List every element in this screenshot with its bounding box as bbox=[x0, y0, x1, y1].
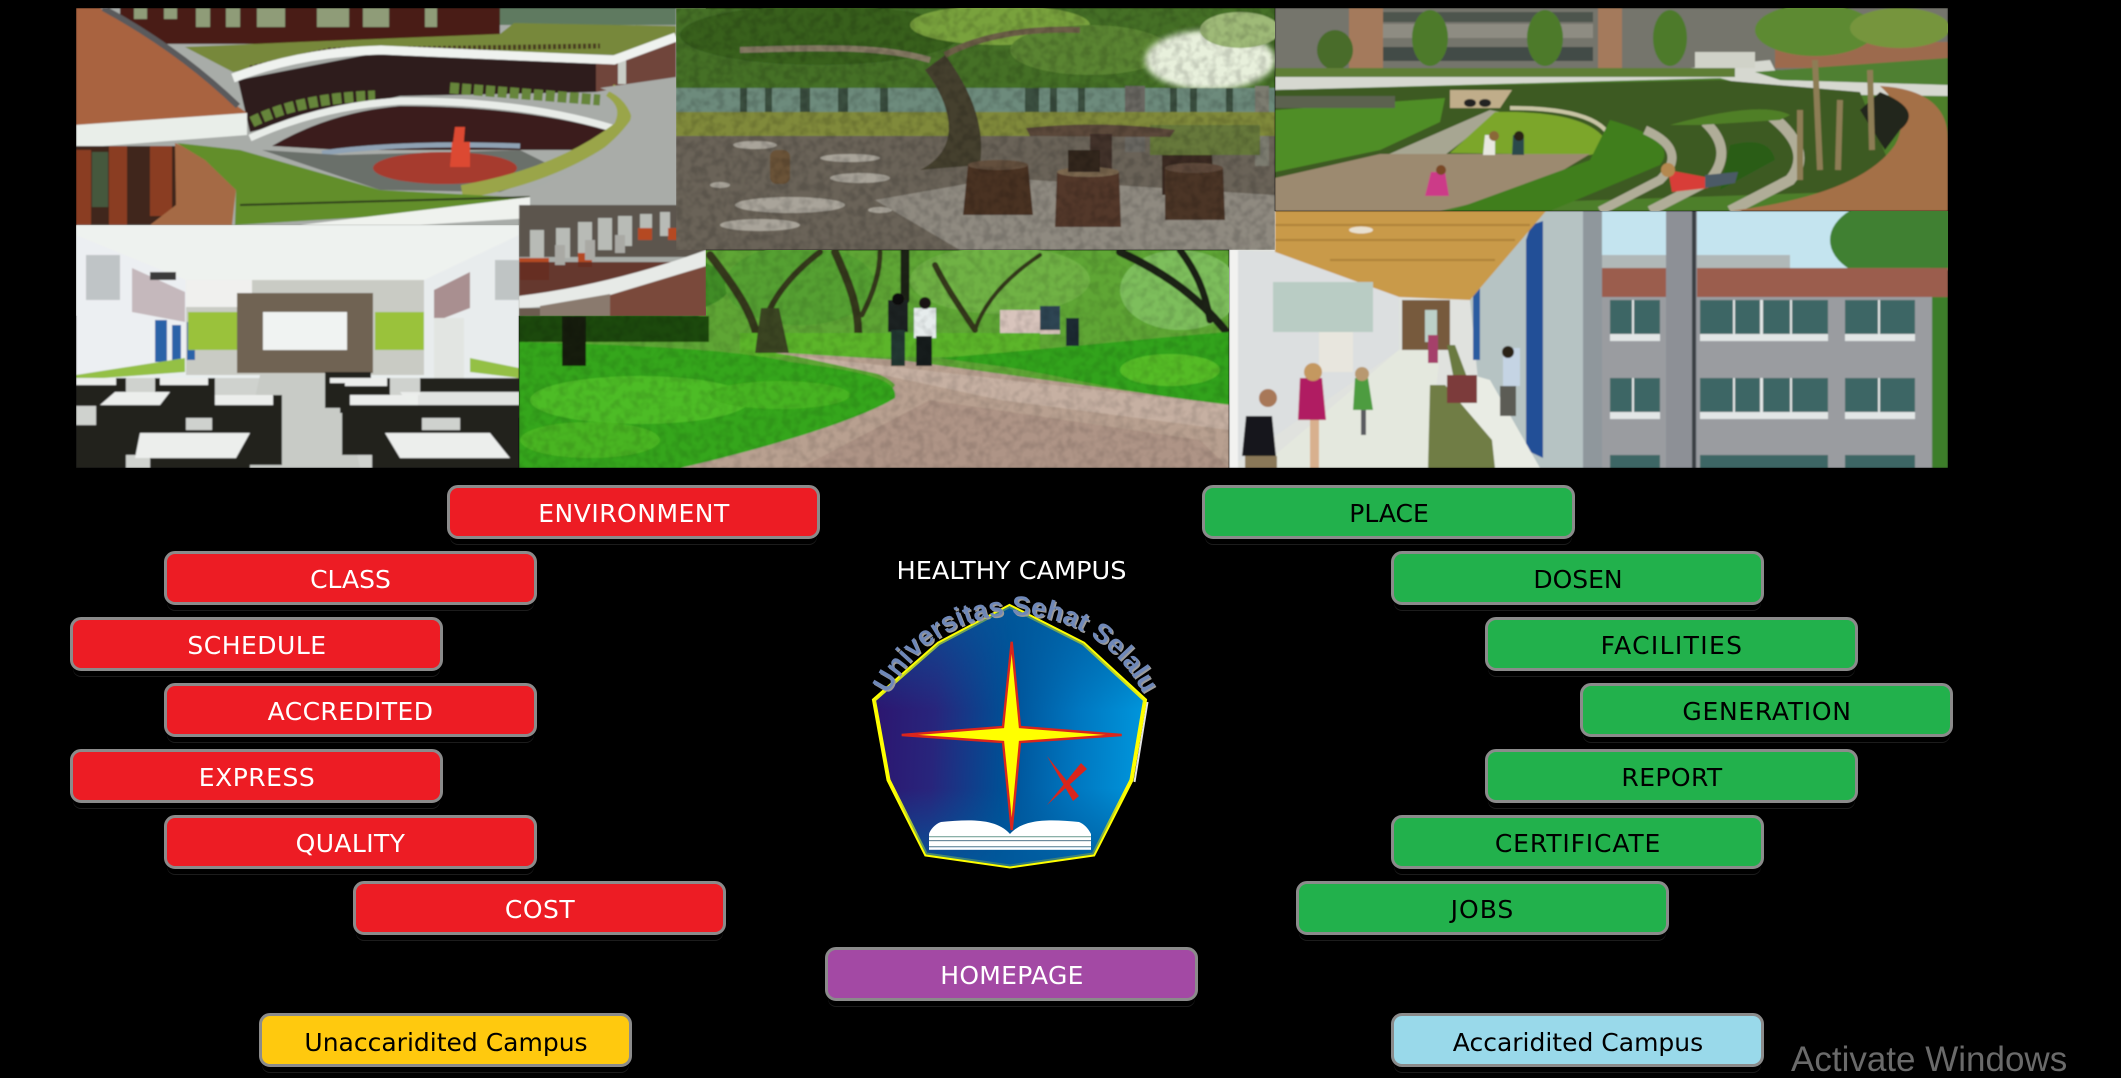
inner lawn bbox=[1450, 112, 1610, 155]
button: QUALITY: QUALITY bbox=[296, 829, 405, 858]
left lawn bbox=[519, 342, 895, 468]
star bbox=[902, 642, 1122, 830]
window side floor bbox=[1462, 376, 1540, 468]
lower dark interior bbox=[272, 106, 606, 150]
hedge bbox=[462, 90, 624, 192]
patterned feature wall bbox=[237, 293, 373, 373]
glass side bbox=[1470, 211, 1584, 468]
desk tops white bbox=[76, 378, 519, 458]
hanging plants bbox=[252, 88, 600, 122]
desks dark bbox=[76, 372, 520, 468]
button: CERTIFICATE: CERTIFICATE bbox=[1495, 829, 1661, 858]
white strip on lower building bbox=[519, 250, 706, 308]
left white wall bbox=[1276, 252, 1397, 296]
stone swale bbox=[1380, 110, 1500, 158]
button: EXPRESS bbox=[70, 749, 443, 803]
fence bbox=[676, 88, 1275, 114]
striped building strip bbox=[519, 205, 706, 257]
button: JOBS bbox=[1296, 881, 1668, 935]
lawn strip and walkway bbox=[1275, 60, 1948, 96]
dark planting band bbox=[1275, 80, 1900, 211]
back wall bbox=[186, 280, 431, 375]
button: EXPRESS: EXPRESS bbox=[199, 763, 315, 792]
button: CLASS: CLASS bbox=[310, 565, 391, 594]
button: PLACE bbox=[1202, 485, 1575, 539]
photo collage and logo bbox=[76, 8, 1948, 868]
stumps bbox=[963, 165, 1033, 215]
wood ceiling bbox=[1275, 211, 1546, 300]
button: FACILITIES bbox=[1485, 617, 1858, 671]
walkers bbox=[888, 293, 1079, 366]
mossy wall bbox=[676, 112, 1275, 136]
button: Unaccaridited Campus: Unaccaridited Campus bbox=[304, 1028, 588, 1057]
brick band bbox=[1560, 268, 1948, 297]
walking kids bbox=[1242, 416, 1276, 456]
curved white roof band bbox=[233, 37, 676, 78]
button: ENVIRONMENT: ENVIRONMENT bbox=[538, 499, 730, 528]
button: JOBS: JOBS bbox=[1451, 895, 1514, 924]
lawn band bbox=[740, 333, 1040, 357]
play structure bbox=[450, 127, 470, 167]
curved university name: Universitas Sehat Selalu bbox=[872, 596, 1155, 693]
open book bbox=[929, 820, 1091, 850]
grass crescent bbox=[1450, 120, 1664, 211]
grass lawn bbox=[177, 143, 530, 225]
ceiling bbox=[76, 225, 519, 280]
shield outline bbox=[874, 606, 1148, 866]
button: Accaridited Campus: Accaridited Campus bbox=[1453, 1028, 1703, 1057]
lower-left building bbox=[76, 146, 176, 225]
wood deck bbox=[1275, 154, 1590, 211]
left lawn bbox=[1275, 98, 1445, 172]
right lawn bbox=[939, 332, 1229, 404]
trees beyond building bbox=[500, 8, 676, 25]
people bbox=[1483, 135, 1495, 155]
curved university name: Universitas Sehat Selalu bbox=[874, 598, 1156, 694]
canopy bbox=[676, 8, 1275, 90]
wooden curved bench bbox=[1730, 86, 1948, 211]
photo: campus park path bbox=[519, 245, 1240, 468]
green panels bbox=[188, 312, 237, 350]
button: SCHEDULE: SCHEDULE bbox=[187, 631, 327, 660]
lower balcony band bbox=[250, 101, 612, 138]
button: FACILITIES: FACILITIES bbox=[1601, 631, 1743, 660]
white slab bbox=[76, 113, 247, 148]
white band bbox=[300, 197, 530, 225]
building backdrop bbox=[1275, 8, 1948, 70]
button: Accaridited Campus bbox=[1391, 1013, 1764, 1067]
curved low walls bbox=[1600, 115, 1799, 211]
dirt slope bbox=[150, 143, 236, 225]
green wall stripes bbox=[76, 358, 185, 380]
button: GENERATION: GENERATION bbox=[1682, 697, 1852, 726]
button: COST bbox=[353, 881, 726, 935]
button: Unaccaridited Campus bbox=[259, 1013, 632, 1067]
button: COST: COST bbox=[505, 895, 575, 924]
photo: green-roof school building bbox=[76, 8, 709, 316]
button: ACCREDITED bbox=[164, 683, 536, 737]
tile floor aisle bbox=[240, 375, 360, 468]
gravel ground dapples bbox=[710, 141, 892, 231]
path surface bbox=[680, 352, 1229, 468]
upper brick building bbox=[120, 8, 500, 44]
table bbox=[1026, 124, 1175, 137]
heading: HEALTHY CAMPUS: HEALTHY CAMPUS bbox=[896, 556, 1126, 585]
fence lines bbox=[240, 197, 530, 205]
trunk and branches bbox=[920, 55, 981, 170]
button: GENERATION bbox=[1580, 683, 1953, 737]
button: DOSEN bbox=[1391, 551, 1764, 605]
whiteboard bbox=[263, 312, 347, 350]
grass roof bbox=[185, 23, 676, 72]
hallway floor bbox=[1260, 350, 1440, 468]
sofas bbox=[1428, 385, 1495, 468]
red X mark bbox=[1047, 756, 1087, 805]
watermark: Activate Windows: Activate Windows bbox=[1791, 1040, 2067, 1078]
button: DOSEN: DOSEN bbox=[1533, 565, 1623, 594]
courtyard floor bbox=[262, 150, 560, 192]
photo: corridor and glass facade bbox=[1229, 198, 1970, 468]
button: CERTIFICATE bbox=[1391, 815, 1764, 869]
tree trunks bbox=[1800, 60, 1872, 180]
left side wall bbox=[76, 235, 186, 375]
dark glazing under roof bbox=[238, 52, 596, 132]
logo: Universitas Sehat Selalu shield bbox=[872, 596, 1156, 868]
button: QUALITY bbox=[164, 815, 536, 869]
seated students and standing boy bbox=[1447, 375, 1477, 403]
button: REPORT: REPORT bbox=[1621, 763, 1723, 792]
trees bbox=[1412, 10, 1448, 66]
photo: amphitheatre landscape bbox=[1275, 4, 1950, 211]
brown dome roof bbox=[76, 8, 247, 125]
projector screen bbox=[186, 280, 252, 307]
small log bbox=[770, 150, 790, 184]
button: ENVIRONMENT bbox=[447, 485, 820, 539]
button: ACCREDITED: ACCREDITED bbox=[268, 697, 433, 726]
concrete pad bbox=[875, 178, 1275, 250]
button: HOMEPAGE: HOMEPAGE bbox=[940, 961, 1084, 990]
sky and tree outside bbox=[1602, 211, 1849, 268]
button: HOMEPAGE bbox=[825, 947, 1198, 1001]
button: PLACE: PLACE bbox=[1349, 499, 1429, 528]
column mullions bbox=[1583, 211, 1602, 468]
button: REPORT bbox=[1485, 749, 1858, 803]
dark tree base at left bbox=[519, 316, 709, 342]
photo: classroom bbox=[76, 225, 520, 468]
grey building bbox=[1601, 296, 1934, 468]
roadway bbox=[600, 76, 676, 147]
button: CLASS bbox=[164, 551, 536, 605]
photo: shaded garden with stump seats bbox=[676, 5, 1280, 250]
button: SCHEDULE bbox=[70, 617, 443, 671]
culvert bbox=[1450, 90, 1512, 108]
right side wall bbox=[424, 235, 519, 375]
